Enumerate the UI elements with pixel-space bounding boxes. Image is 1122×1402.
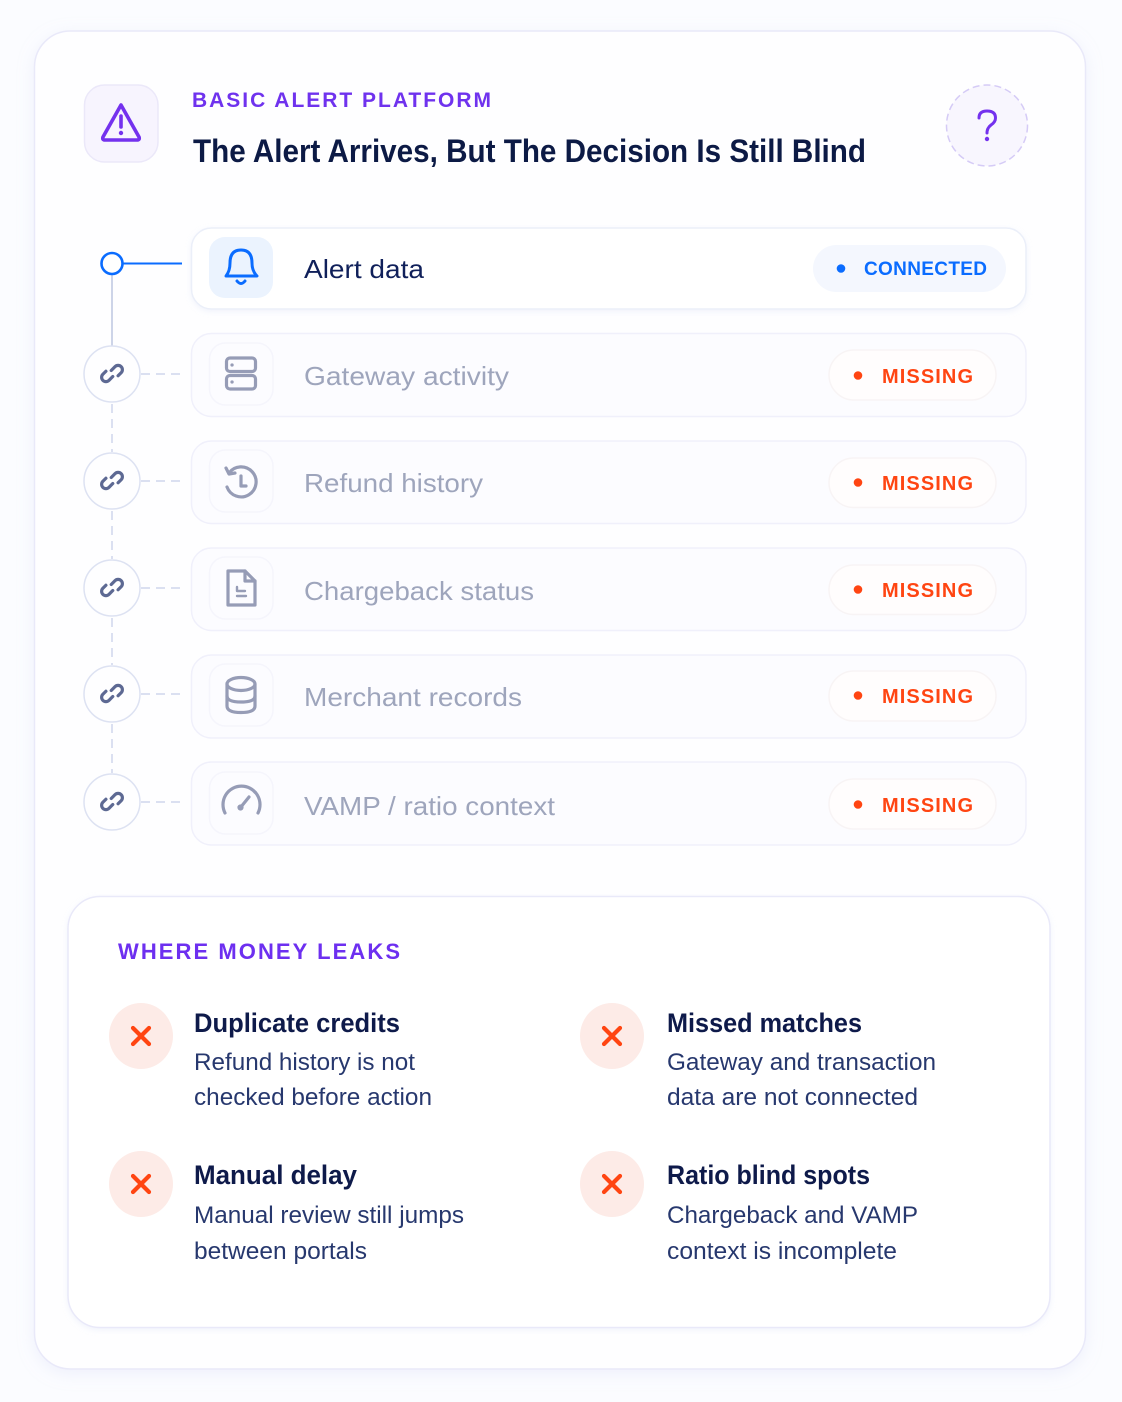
label: VAMP / ratio context <box>304 791 556 821</box>
status pill: connected <box>813 245 1006 292</box>
status pill: missing <box>829 565 996 614</box>
title: The Alert Arrives, But The Decision Is Still Blind <box>193 133 866 169</box>
label: Gateway activity <box>304 361 509 391</box>
status pill: missing: MISSING <box>882 580 973 602</box>
icon: history clock <box>226 467 256 497</box>
item: duplicate credits: Duplicate credits <box>194 1008 400 1038</box>
item: duplicate credits <box>109 1003 432 1111</box>
item: duplicate credits: Refund history is not <box>194 1049 415 1076</box>
link node <box>84 453 182 509</box>
status pill: missing: MISSING <box>882 795 973 817</box>
item: missed matches: Gateway and transaction <box>667 1049 936 1076</box>
row: chargeback status <box>84 548 1026 630</box>
item: missed matches: Missed matches <box>667 1008 862 1038</box>
icon: server <box>226 358 256 389</box>
row: alert data <box>192 228 1026 309</box>
link node <box>84 666 182 722</box>
status pill: missing <box>829 350 996 400</box>
status pill: missing <box>829 779 996 829</box>
item: missed matches <box>580 1003 936 1111</box>
link node <box>84 346 182 402</box>
label: Alert data <box>304 254 425 284</box>
item: ratio blind spots: Chargeback and VAMP <box>667 1202 918 1229</box>
icon: gauge <box>223 786 260 813</box>
panel: where money leaks <box>68 896 1050 1328</box>
label: Refund history <box>304 468 483 498</box>
row: vamp ratio context <box>84 762 1026 845</box>
icon: question mark badge <box>946 85 1028 166</box>
row: merchant records <box>84 655 1026 738</box>
section heading: WHERE MONEY LEAKS <box>118 939 400 964</box>
item: missed matches: data are not connected <box>667 1084 918 1111</box>
item: ratio blind spots <box>580 1151 918 1265</box>
status pill: connected: CONNECTED <box>864 259 987 280</box>
item: manual delay: Manual review still jumps <box>194 1202 464 1229</box>
label: Merchant records <box>304 682 522 712</box>
item: manual delay: between portals <box>194 1238 367 1265</box>
item: manual delay <box>109 1151 464 1265</box>
label: Chargeback status <box>304 576 534 606</box>
icon: database <box>227 678 255 712</box>
icon: document <box>228 571 255 605</box>
status pill: missing <box>829 458 996 508</box>
status pill: missing: MISSING <box>882 473 973 495</box>
connector rail <box>102 253 182 773</box>
link node <box>84 774 182 830</box>
item: ratio blind spots: Ratio blind spots <box>667 1160 870 1190</box>
icon: bell <box>209 237 273 298</box>
status pill: missing: MISSING <box>882 686 973 708</box>
status pill: missing: MISSING <box>882 366 973 388</box>
link node <box>84 560 182 616</box>
item: duplicate credits: checked before action <box>194 1084 432 1111</box>
status pill: missing <box>829 671 996 721</box>
eyebrow heading: BASIC ALERT PLATFORM <box>192 89 491 112</box>
row: gateway activity <box>84 334 1026 416</box>
item: manual delay: Manual delay <box>194 1160 357 1190</box>
item: ratio blind spots: context is incomplete <box>667 1238 897 1265</box>
icon: warning triangle <box>84 85 158 162</box>
row: refund history <box>84 441 1026 524</box>
